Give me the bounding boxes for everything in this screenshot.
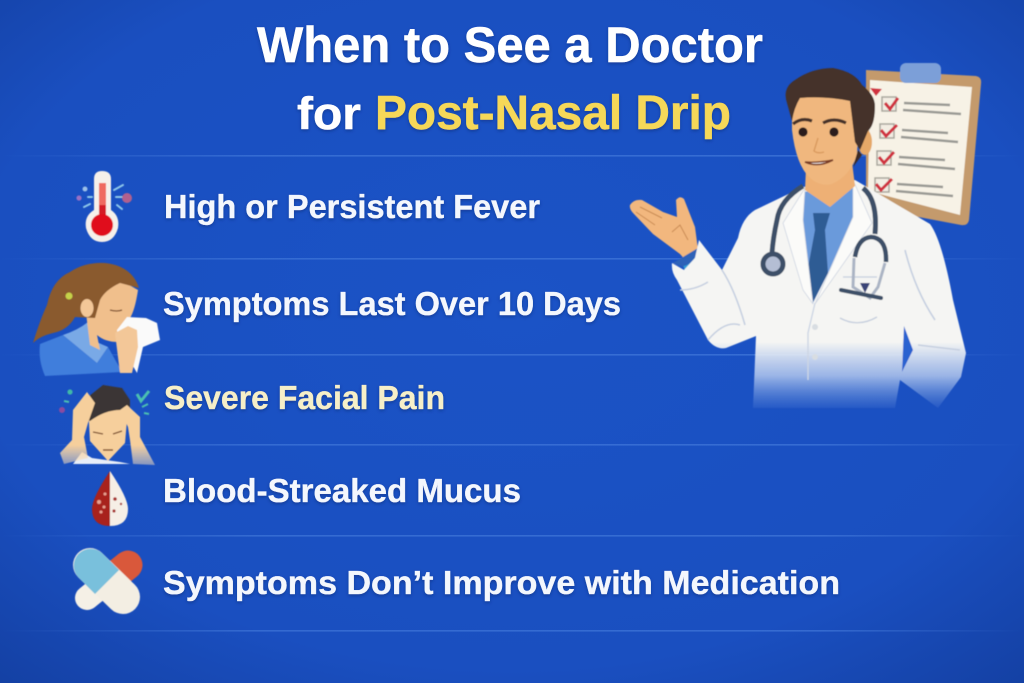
title: When to See a Doctor <box>257 17 763 73</box>
hand <box>630 197 699 263</box>
icon: pills <box>74 549 128 598</box>
white coat <box>672 180 966 408</box>
label: High or Persistent Fever <box>164 188 540 225</box>
neck <box>805 162 855 207</box>
item: symptoms don't improve with medication <box>74 549 840 601</box>
item: symptoms last over 10 days <box>33 263 621 376</box>
label: Symptoms Last Over 10 Days <box>163 285 621 322</box>
title: Post-Nasal Drip <box>375 87 731 140</box>
icon: woman blowing nose <box>33 263 160 376</box>
sleeve cuff <box>673 248 702 270</box>
icon: blood drop <box>92 471 128 526</box>
shirt and tie <box>802 187 855 303</box>
title <box>257 17 763 140</box>
label: Blood-Streaked Mucus <box>163 472 521 509</box>
lapels <box>783 188 813 304</box>
stethoscope <box>763 186 886 298</box>
item: high or persistent fever <box>76 171 540 242</box>
item: blood-streaked mucus <box>92 471 521 526</box>
icon: thermometer <box>76 171 132 242</box>
item: severe facial pain <box>59 379 445 465</box>
coat shadows <box>680 250 960 350</box>
head <box>792 92 860 185</box>
icon: clipboard checklist <box>866 63 981 225</box>
label: Symptoms Don’t Improve with Medication <box>163 564 840 601</box>
icon: man holding head <box>59 385 155 465</box>
label: Severe Facial Pain <box>164 379 445 416</box>
title: for <box>297 88 361 139</box>
illustration: doctor with clipboard <box>630 63 981 408</box>
